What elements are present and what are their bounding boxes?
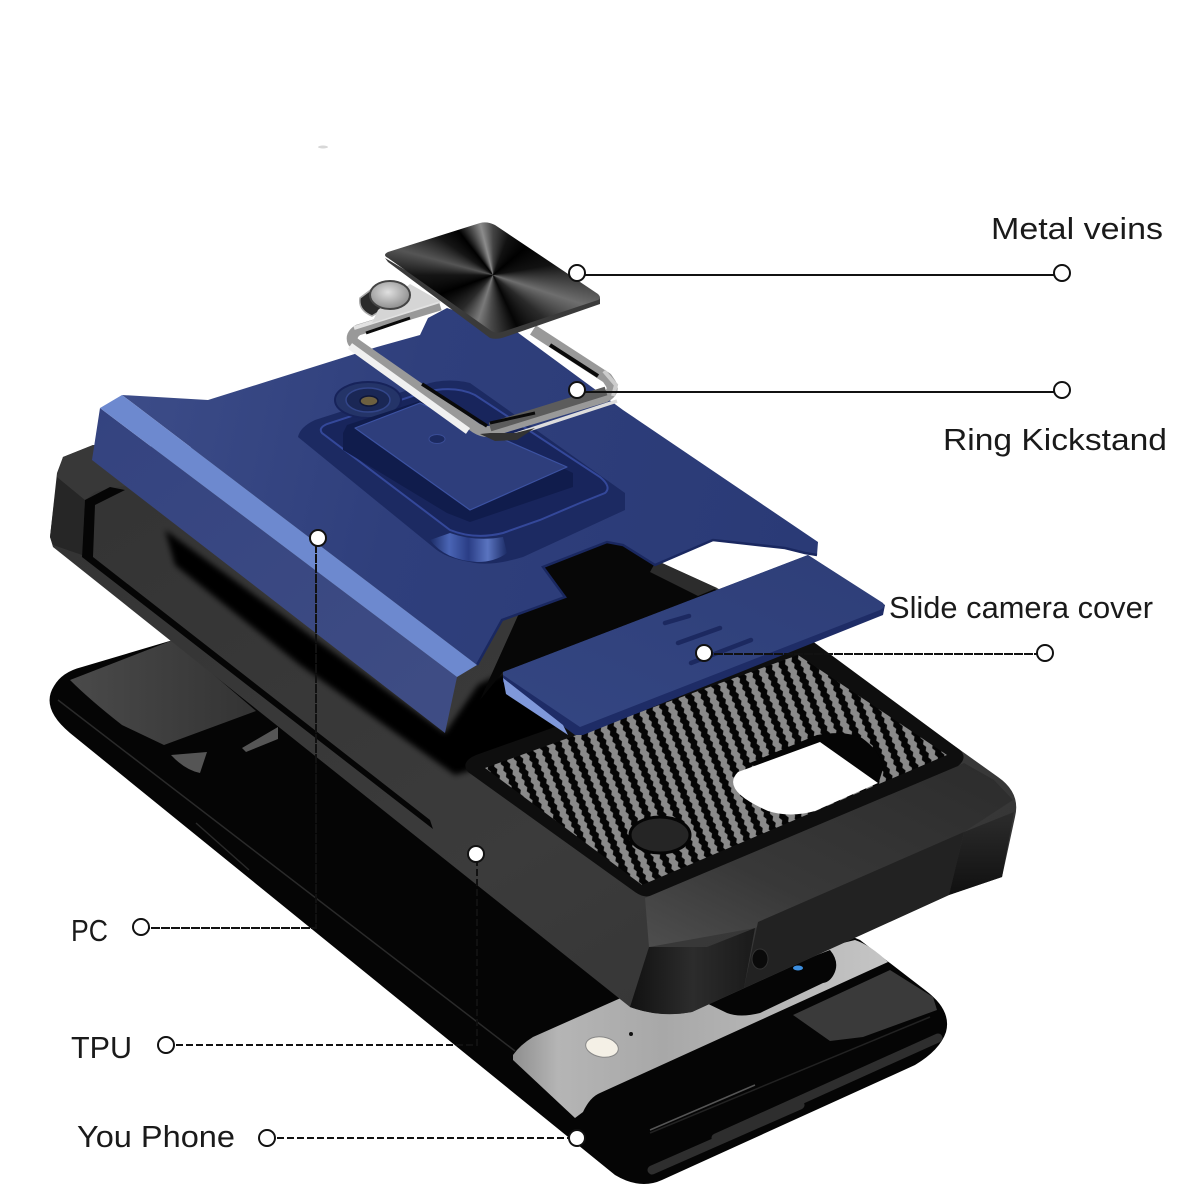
camera-style mount circle bbox=[335, 382, 401, 418]
plate notch shadow edge bbox=[477, 540, 817, 665]
phone camera lens glint bbox=[793, 966, 803, 970]
camera opening bbox=[733, 742, 878, 814]
camera opening shadow bbox=[745, 733, 882, 785]
case charging port bbox=[752, 949, 768, 969]
anchor dot bbox=[468, 846, 484, 862]
gap under plate notch bbox=[480, 538, 717, 700]
carbon fibre panel bbox=[485, 655, 947, 885]
leader line bbox=[141, 538, 316, 928]
label: You Phone bbox=[77, 1119, 235, 1154]
case lower bevel bbox=[645, 763, 1013, 947]
kickstand right corner highlight bbox=[604, 371, 616, 396]
end dot bbox=[259, 1130, 275, 1146]
leader line bbox=[166, 854, 477, 1045]
kickstand hinge arm bbox=[372, 284, 440, 323]
phone lower reflection bbox=[793, 970, 937, 1041]
kickstand left leg inner black bbox=[422, 384, 487, 426]
case edge strip in gap bbox=[650, 563, 717, 596]
mount circle hole bbox=[360, 396, 378, 406]
kickstand upper corner highlight bbox=[354, 301, 440, 328]
mount circle rings bbox=[346, 388, 390, 412]
mount circle outer bbox=[335, 382, 401, 418]
kickstand top inner black bbox=[366, 318, 410, 333]
phone reflection shards bbox=[171, 727, 278, 773]
kickstand bottom black line bbox=[490, 413, 535, 423]
cover light underside bbox=[503, 678, 568, 735]
faint smudge bbox=[318, 146, 328, 148]
phone camera bar bbox=[700, 950, 836, 1016]
slide camera cover panel bbox=[503, 555, 885, 735]
callout: You Phone bbox=[77, 1119, 585, 1154]
plate front face bbox=[92, 408, 457, 733]
leader line bbox=[267, 1137, 577, 1139]
kickstand hinge pin bbox=[370, 281, 410, 309]
center dimple bbox=[429, 434, 445, 444]
ring kickstand bbox=[350, 258, 617, 441]
kickstand bottom highlight bbox=[510, 401, 617, 436]
leader line bbox=[577, 391, 1062, 393]
leader line bbox=[704, 653, 1045, 655]
anchor dot bbox=[310, 530, 326, 546]
label: Slide camera cover bbox=[889, 590, 1153, 625]
case corner side bbox=[630, 928, 755, 1014]
kickstand left leg highlight bbox=[350, 346, 468, 431]
kickstand lower foot bbox=[480, 428, 535, 441]
kickstand bottom band bbox=[490, 391, 606, 427]
end dot bbox=[158, 1037, 174, 1053]
callout: TPU bbox=[71, 846, 484, 1065]
disc underside edge bbox=[385, 258, 600, 339]
carbon panel button hole bbox=[630, 817, 690, 853]
label: PC bbox=[71, 913, 108, 948]
phone microphone bbox=[629, 1032, 633, 1036]
phone bbox=[50, 640, 947, 1184]
label: Ring Kickstand bbox=[943, 422, 1167, 457]
end dot bbox=[1054, 382, 1070, 398]
ring mount recess bbox=[298, 380, 625, 564]
kickstand right bar black bbox=[550, 345, 598, 376]
label: TPU bbox=[71, 1030, 132, 1065]
phone body bbox=[50, 640, 947, 1184]
anchor dot bbox=[569, 265, 585, 281]
plate top surface bbox=[122, 308, 818, 665]
raised square top bbox=[355, 403, 567, 510]
case front panel bbox=[744, 832, 964, 988]
phone flash bbox=[584, 1034, 620, 1060]
case top-left lit corner bbox=[57, 445, 135, 500]
end dot bbox=[1054, 265, 1070, 281]
leader line bbox=[577, 274, 1062, 276]
case shadow under plate bbox=[165, 530, 575, 775]
callout: Metal veins bbox=[569, 211, 1163, 281]
label: Metal veins bbox=[991, 211, 1163, 246]
cover slider ridges bbox=[665, 616, 751, 663]
kickstand frame base bbox=[352, 305, 612, 432]
kickstand hinge lug bbox=[360, 289, 385, 316]
anchor dot bbox=[569, 382, 585, 398]
recess bright rim bbox=[430, 533, 507, 562]
case side slot bbox=[82, 487, 433, 829]
phone screen reflection bbox=[70, 640, 256, 745]
case bbox=[50, 445, 1016, 1014]
callout: Slide camera cover bbox=[696, 590, 1153, 661]
phone glass edge bbox=[650, 1017, 930, 1133]
recess inner line bbox=[321, 389, 608, 536]
case window frame bbox=[465, 639, 964, 896]
cover top bbox=[503, 555, 884, 727]
anchor dot bbox=[569, 1130, 585, 1146]
anchor dot bbox=[696, 645, 712, 661]
phone camera band bbox=[513, 940, 888, 1118]
plate chamfer highlight bbox=[100, 395, 477, 677]
case end face bbox=[50, 477, 85, 555]
cover underside edge bbox=[503, 555, 885, 735]
phone lower edge highlights bbox=[652, 1038, 938, 1170]
phone side seam and sim tray bbox=[58, 700, 515, 1051]
end dot bbox=[133, 919, 149, 935]
back plate bbox=[92, 308, 818, 733]
callout: PC bbox=[71, 530, 326, 948]
case body bbox=[50, 445, 1016, 1014]
case right end panel bbox=[949, 812, 1014, 895]
callout: Ring Kickstand bbox=[569, 382, 1167, 457]
metal veins disc bbox=[385, 222, 600, 332]
end dot bbox=[1037, 645, 1053, 661]
phone glass glint bbox=[650, 1085, 755, 1130]
raised square wall bbox=[343, 400, 573, 522]
